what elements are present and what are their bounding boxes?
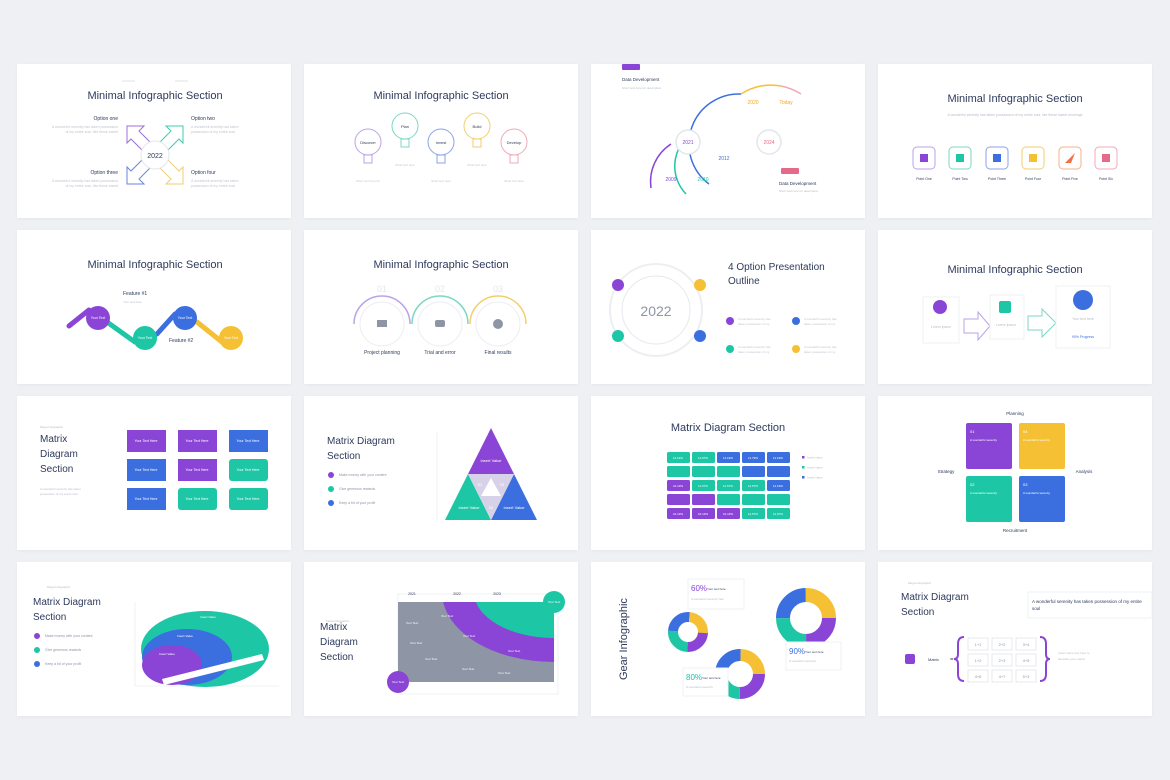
label box bottom: Short text here for description (779, 189, 819, 193)
grid cells: 2+3 (999, 658, 1006, 663)
callouts: A wonderful serenity (686, 685, 714, 689)
icons: Point Two (952, 177, 968, 181)
step cards (923, 286, 1110, 348)
title: possession of my entire soul (40, 492, 78, 496)
panel: zigzag features (17, 230, 291, 384)
circles: Your Text (138, 336, 152, 340)
title: Minimal Infographic Section (947, 93, 1083, 105)
title: Minimal Infographic Section (373, 259, 509, 271)
chart: Your Text (392, 680, 404, 684)
bulbs: Short text here for (356, 179, 380, 183)
panel: timeline arcs: 2010 (697, 177, 709, 183)
title: A wonderful serenity has taken (40, 487, 81, 491)
panel: triangle (304, 396, 578, 550)
center circle 2022: 2022 (147, 153, 163, 160)
grid cells (968, 638, 1036, 682)
matrix label (905, 654, 954, 664)
options: Option three (90, 170, 118, 176)
grid: 11.13% (673, 456, 683, 460)
chart: Your Text (441, 614, 453, 618)
quadrants: 03 (1023, 482, 1028, 487)
grid: 11.19% (723, 456, 733, 460)
callouts: Your text here (707, 587, 726, 591)
icons (913, 147, 1117, 181)
callout: soul (1032, 606, 1040, 611)
grid: 11.67% (723, 484, 733, 488)
grid: Your Text Here (186, 468, 209, 472)
options: A wonderful serenity has taken (191, 179, 239, 183)
matrix label: Matrix (928, 657, 939, 662)
icons: Point One (916, 177, 932, 181)
options: possession of my entire soul (191, 130, 235, 134)
step cards: Your text here (1072, 317, 1094, 321)
steps: 01 (377, 284, 387, 294)
callouts: Your text here (702, 676, 721, 680)
chart: Your Text (548, 600, 560, 604)
panel: braces matrix (878, 562, 1152, 716)
circles: Your Text (91, 316, 105, 320)
chart: Your Text (410, 641, 422, 645)
callouts: 60% (691, 584, 707, 593)
bulbs: Develop (507, 140, 522, 145)
grid: Your Text Here (186, 439, 209, 443)
title: Minimal Infographic Section (87, 259, 223, 271)
panel: quadrant (878, 396, 1152, 550)
bulbs: Short text here (504, 179, 524, 183)
grid cells: 3+4 (1023, 642, 1030, 647)
legend (802, 456, 823, 480)
grid: 11.67% (748, 512, 758, 516)
panel: matrix 3x3 (17, 396, 291, 550)
title: Section (320, 652, 353, 663)
grid cells: 2+2 (999, 642, 1006, 647)
triangle: 01 (478, 482, 483, 487)
braces (954, 637, 1050, 681)
chart: Your Text (462, 667, 474, 671)
ellipses: Insert Value (200, 615, 216, 619)
labels: Strategy (938, 469, 955, 474)
arcs (651, 85, 801, 194)
chart: 2022 (453, 592, 461, 596)
gear 1 (673, 617, 703, 647)
panel: timeline arcs: 2020 (747, 100, 759, 106)
steps: Trial and error (424, 350, 456, 356)
quadrants: A wonderful serenity (970, 491, 998, 495)
list: Give generous rewards (45, 648, 81, 652)
panel: timeline arcs: 2024 (763, 140, 775, 146)
step cards: Lorem ipsum (996, 323, 1016, 327)
grid: Your Text Here (237, 468, 260, 472)
ellipses: Insert Value (159, 652, 175, 656)
options: taken possession of my (804, 350, 836, 354)
quadrants: A wonderful serenity (1023, 491, 1051, 495)
panel: wedge matrix (304, 562, 578, 716)
title: Matrix (40, 434, 67, 445)
title: Minimal Infographic Section (87, 90, 223, 102)
options: possession of my entire soul (191, 184, 235, 188)
chart: Your Text (508, 649, 520, 653)
grid: Your Text Here (237, 439, 260, 443)
options: A wonderful serenity has (804, 317, 837, 321)
title (33, 585, 101, 623)
feature labels: Feature #2 (169, 338, 193, 344)
vertical title: Gear Infographic (618, 598, 630, 680)
panel: timeline arcs: 2021 (682, 140, 694, 146)
title: Mega Infographic (47, 585, 71, 589)
options: A wonderful serenity has taken possession (52, 125, 118, 129)
callouts: A wonderful serenity has (691, 597, 724, 601)
steps: 02 (435, 284, 445, 294)
panel: timeline arcs (591, 64, 865, 218)
options: A wonderful serenity has (738, 345, 771, 349)
title: Section (33, 612, 66, 623)
callouts: Your text here (805, 650, 824, 654)
callouts (683, 579, 841, 696)
options: taken possession of my (738, 322, 770, 326)
panel: matrix 5x5 (591, 396, 865, 550)
panel: three semicircles (304, 230, 578, 384)
grid: Your Text Here (135, 439, 158, 443)
step cards: Lorem ipsum (931, 325, 951, 329)
grid: Your Text Here (237, 497, 260, 501)
legend: Insert value (807, 466, 823, 470)
step cards: 90% Progress (1072, 335, 1094, 339)
grid cells: 5+3 (1023, 674, 1030, 679)
grid: 11.57% (748, 484, 758, 488)
labels (938, 411, 1093, 533)
steps: 03 (493, 284, 503, 294)
callouts: A wonderful serenity (789, 659, 817, 663)
options: A wonderful serenity has taken possession (52, 179, 118, 183)
grid: 11.67% (773, 512, 783, 516)
grid: 11.19% (773, 456, 783, 460)
bulbs (355, 113, 527, 183)
matrix label: = (950, 657, 954, 663)
steps (354, 284, 526, 356)
options: taken possession of my (738, 350, 770, 354)
grid: 11.57% (698, 484, 708, 488)
panel: braces matrix: describe your matrix (1058, 657, 1086, 661)
circle 2022 (610, 264, 706, 356)
panel: ellipse matrix (17, 562, 291, 716)
chart: Your Text (425, 657, 437, 661)
gear 3 (783, 595, 829, 641)
icons: Point Four (1025, 177, 1042, 181)
grid: 41.13% (698, 512, 708, 516)
callout (1028, 592, 1152, 618)
circles: Your Text (178, 316, 192, 320)
panel: 2022 outline: Outline (728, 276, 760, 287)
grid cells: 4+5 (1023, 658, 1030, 663)
panel: braces matrix: Insert some text here to (1058, 651, 1090, 655)
bulbs: Build (473, 124, 481, 129)
bulbs: Short text here (395, 163, 415, 167)
circle 2022: 2022 (640, 303, 672, 319)
options: A wonderful serenity has (738, 317, 771, 321)
grid cells: 1+2 (975, 658, 982, 663)
triangle (445, 428, 537, 520)
quadrants (966, 423, 1065, 522)
title: Mega Infographic (40, 425, 64, 429)
callouts: 80% (686, 673, 702, 682)
steps: Final results (485, 350, 512, 356)
options (52, 116, 239, 188)
options: taken possession of my (804, 322, 836, 326)
options (726, 317, 837, 354)
options: Option two (191, 116, 215, 122)
feature labels: Feature #1 (123, 291, 147, 297)
title (40, 425, 81, 496)
label box top: Data Development (622, 77, 660, 82)
bulbs: Short text here (431, 179, 451, 183)
grid (667, 452, 790, 519)
center circle 2022 (141, 141, 169, 169)
options: A wonderful serenity has taken (191, 125, 239, 129)
triangle: 03 (500, 482, 505, 487)
panel: bulbs process (304, 64, 578, 218)
panel: gear infographic (591, 562, 865, 716)
grid (127, 430, 268, 510)
label box top: Short text here for description (622, 86, 662, 90)
bulbs: Short text here (467, 163, 487, 167)
legend: Insert value (807, 456, 823, 460)
label box bottom (779, 168, 819, 193)
steps: Project planning (364, 350, 400, 356)
triangle: 02 (489, 505, 494, 510)
list (34, 633, 92, 667)
title: Section (901, 607, 934, 618)
panel: timeline arcs: 2009 (665, 177, 677, 183)
title: Section (40, 464, 73, 475)
title: 4 Option Presentation (728, 262, 825, 273)
chart: Your Text (498, 671, 510, 675)
circles: Your Text (224, 336, 238, 340)
quadrants: A wonderful serenity (1023, 438, 1051, 442)
panel: timeline arcs: Today (779, 100, 793, 106)
chart: 2021 (408, 592, 416, 596)
triangle: Insert Value (503, 505, 525, 510)
feature labels: Your text here (123, 300, 142, 304)
grid: Your Text Here (186, 497, 209, 501)
list: Give generous rewards (339, 487, 375, 491)
options: of my entire soul, like these sweet (65, 130, 118, 134)
options: Option one (94, 116, 118, 122)
icons: Point Six (1099, 177, 1113, 181)
zigzag line (69, 310, 222, 342)
bulbs: Discover (360, 140, 376, 145)
bulbs: Invest (436, 140, 447, 145)
legend: Insert value (807, 476, 823, 480)
title: Mega Infographic (326, 619, 350, 623)
options: A wonderful serenity has (804, 345, 837, 349)
circles (86, 306, 243, 350)
options: Option four (191, 170, 216, 176)
title: Matrix Diagram Section (671, 422, 785, 434)
triangle: Insert Value (458, 505, 480, 510)
label box bottom: Data Development (779, 181, 817, 186)
icons: Point Three (988, 177, 1006, 181)
grid: 11.19% (773, 484, 783, 488)
grid: 41.13% (723, 512, 733, 516)
title: Diagram (320, 637, 358, 648)
icons: Point Five (1062, 177, 1078, 181)
panel: timeline arcs: 2012 (718, 156, 730, 162)
title (327, 436, 395, 462)
quadrants: 04 (1023, 429, 1028, 434)
callout: A wonderful serenity has taken possession of my entire (1032, 599, 1142, 604)
list: Make money with your content (339, 473, 386, 477)
bulbs: Plan (401, 124, 409, 129)
labels: Planning (1006, 411, 1024, 416)
grid: Your Text Here (135, 497, 158, 501)
list: Make money with your content (45, 634, 92, 638)
title: Matrix Diagram (33, 597, 101, 608)
chart (387, 591, 565, 694)
panel: icon row: A wonderful serenity has taken possession of my entire soul, like these sweet mornings (947, 113, 1083, 117)
chart: Your Text (463, 634, 475, 638)
title: Mega Infographic (908, 581, 932, 585)
grid cells: 1+1 (975, 642, 982, 647)
panel: icon row (878, 64, 1152, 218)
title: Matrix (320, 622, 347, 633)
grid: 41.13% (673, 484, 683, 488)
chart: 2023 (493, 592, 501, 596)
arrows (127, 126, 183, 184)
label box top (622, 64, 662, 90)
labels: Analysis (1076, 469, 1093, 474)
labels: Recruitment (1003, 528, 1028, 533)
title: Section (327, 451, 360, 462)
triangle: Insert Value (480, 458, 502, 463)
title: Diagram (40, 449, 78, 460)
gear 2 (721, 655, 759, 693)
options: of my entire soul, like these sweet (65, 184, 118, 188)
title (320, 619, 358, 663)
title: Matrix Diagram (901, 592, 969, 603)
title (901, 581, 969, 618)
quadrants: 02 (970, 482, 975, 487)
grid cells: 4+7 (999, 674, 1006, 679)
callouts: 90% (789, 647, 805, 656)
quadrants: 01 (970, 429, 975, 434)
grid: 11.67% (698, 456, 708, 460)
ellipses: Insert Value (177, 634, 193, 638)
feature labels (123, 291, 193, 344)
panel: 2022 outline (591, 230, 865, 384)
title: Matrix Diagram (327, 436, 395, 447)
grid: 11.79% (748, 456, 758, 460)
grid: Your Text Here (135, 468, 158, 472)
list (328, 472, 386, 506)
list: Keep a bit of your profit (339, 501, 375, 505)
panel: minimal infographic arrows (17, 64, 291, 218)
list: Keep a bit of your profit (45, 662, 81, 666)
ellipses (135, 602, 279, 687)
chart: Your Text (406, 621, 418, 625)
panel: arrow steps (878, 230, 1152, 384)
quadrants: A wonderful serenity (970, 438, 998, 442)
title: Minimal Infographic Section (947, 264, 1083, 276)
title: Minimal Infographic Section (373, 90, 509, 102)
grid: 41.13% (673, 512, 683, 516)
grid cells: 4+6 (975, 674, 982, 679)
